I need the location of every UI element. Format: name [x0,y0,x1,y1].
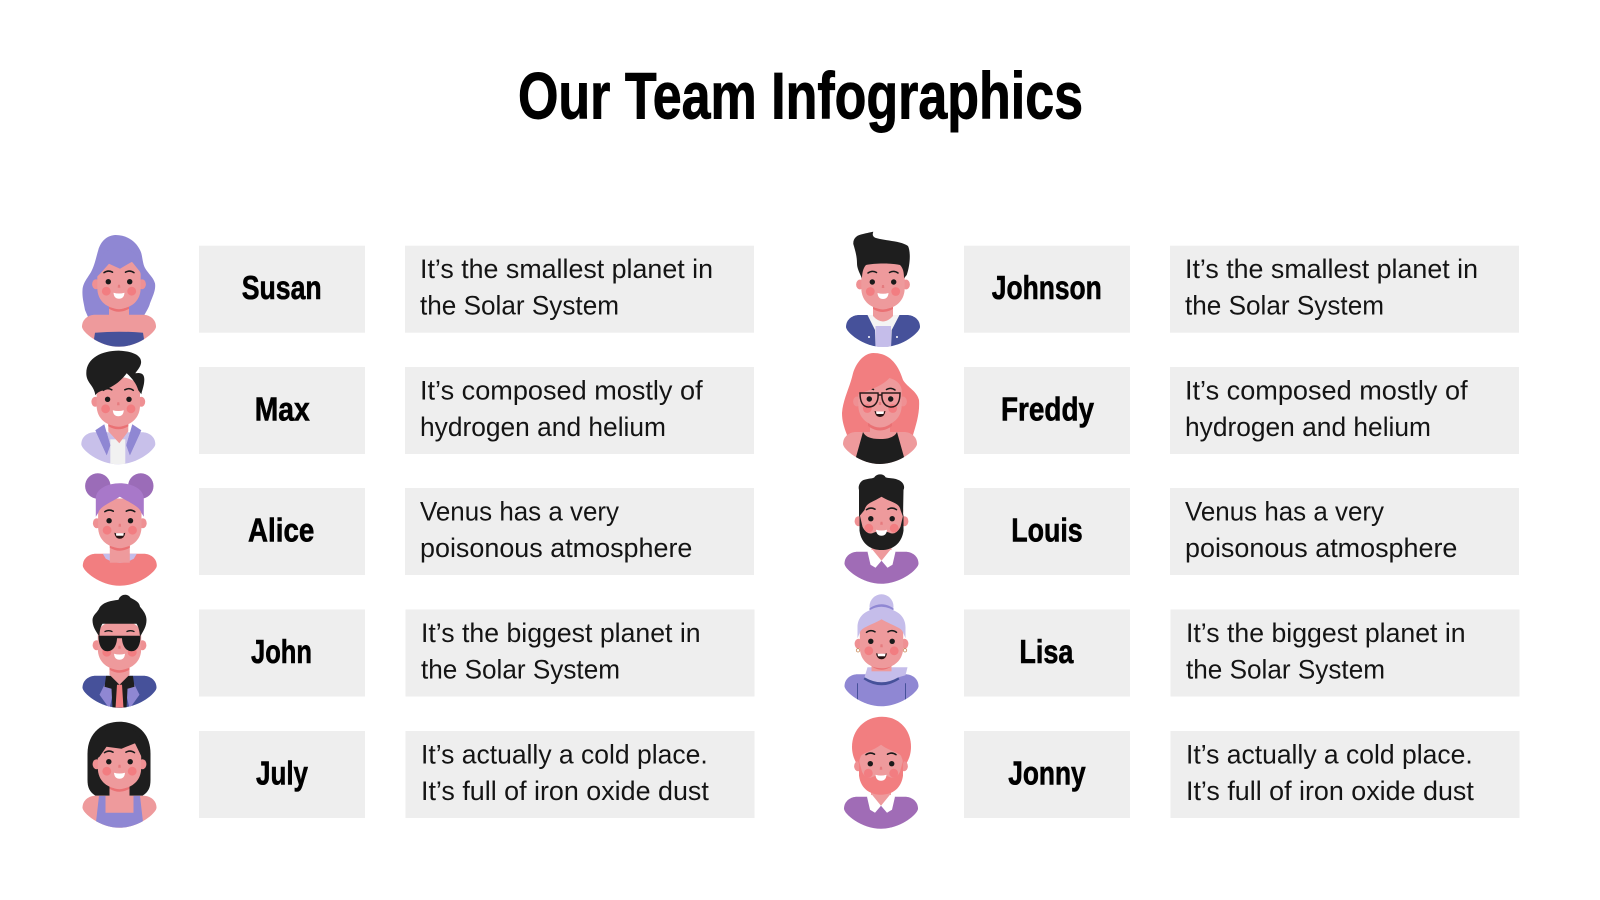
description box: July [406,731,754,818]
description: Alice: poisonous atmosphere [420,533,692,563]
panel: Jonny row [844,717,1520,829]
name: John: John [251,633,312,670]
description box: Louis [1170,488,1519,575]
avatar: Louis [844,474,918,584]
name box: Max [199,367,365,454]
avatar: Max [81,351,155,467]
avatar: Susan [82,235,156,352]
panel: Lisa row [844,594,1520,706]
panel: John row [82,595,754,709]
description: Johnson: the Solar System [1185,291,1384,321]
panel: Freddy row [842,353,1519,469]
name box: Lisa [964,610,1130,696]
description: Freddy: hydrogen and helium [1185,412,1431,442]
avatar: Alice [83,473,157,586]
name: Max: Max [255,390,310,428]
name box: Freddy [964,367,1130,454]
avatar: John [82,595,156,709]
avatar: Johnson [846,232,920,350]
description: Jonny: It’s actually a cold place. [1186,740,1473,770]
name box: John [199,610,365,696]
name: Johnson: Johnson [992,269,1102,306]
name box: Louis [964,488,1130,575]
panel: July row [82,722,754,833]
name: Freddy: Freddy [1001,390,1095,428]
description: Lisa: It’s the biggest planet in [1186,618,1466,648]
description: Lisa: the Solar System [1186,654,1385,684]
description: Alice: Venus has a very [420,496,620,526]
panel: Max row [81,351,754,467]
avatar: Freddy [842,353,919,469]
name: Jonny: Jonny [1008,754,1086,792]
name box: Johnson [964,246,1130,333]
description: John: the Solar System [421,654,620,684]
description box: Max [405,367,754,454]
description box: Lisa [1170,610,1520,696]
avatar: Lisa [844,594,918,706]
name box: Susan [199,246,365,333]
description box: Susan [405,246,754,333]
avatar: July [82,722,156,833]
description: Susan: It’s the smallest planet in [420,254,713,284]
description: Max: It’s composed mostly of [420,376,703,406]
description: Freddy: It’s composed mostly of [1185,376,1468,406]
description: Johnson: It’s the smallest planet in [1185,254,1478,284]
avatar: Jonny [844,717,918,829]
name: Louis: Louis [1011,512,1083,548]
name: Lisa: Lisa [1019,633,1074,670]
description: John: It’s the biggest planet in [421,618,701,648]
description: Jonny: It’s full of iron oxide dust [1186,776,1474,806]
name: Susan: Susan [242,269,322,306]
name box: Alice [199,488,365,575]
title: Our Team Infographics [518,58,1083,132]
name: Alice: Alice [248,512,314,548]
name box: Jonny [964,731,1130,818]
description: Susan: the Solar System [420,291,619,321]
description box: Johnson [1170,246,1519,333]
description: Max: hydrogen and helium [420,412,666,442]
description box: Freddy [1170,367,1519,454]
description: July: It’s actually a cold place. [421,740,708,770]
panel: Alice row [83,473,754,586]
description box: John [406,610,754,696]
description box: Jonny [1170,731,1520,818]
description: July: It’s full of iron oxide dust [421,776,709,806]
panel: Johnson row [846,232,1519,350]
panel: Louis row [844,474,1519,584]
name: July: July [256,754,308,792]
description box: Alice [405,488,754,575]
description: Louis: Venus has a very [1185,496,1385,526]
panel: Susan row [82,235,754,352]
description: Louis: poisonous atmosphere [1185,533,1457,563]
name box: July [199,731,365,818]
